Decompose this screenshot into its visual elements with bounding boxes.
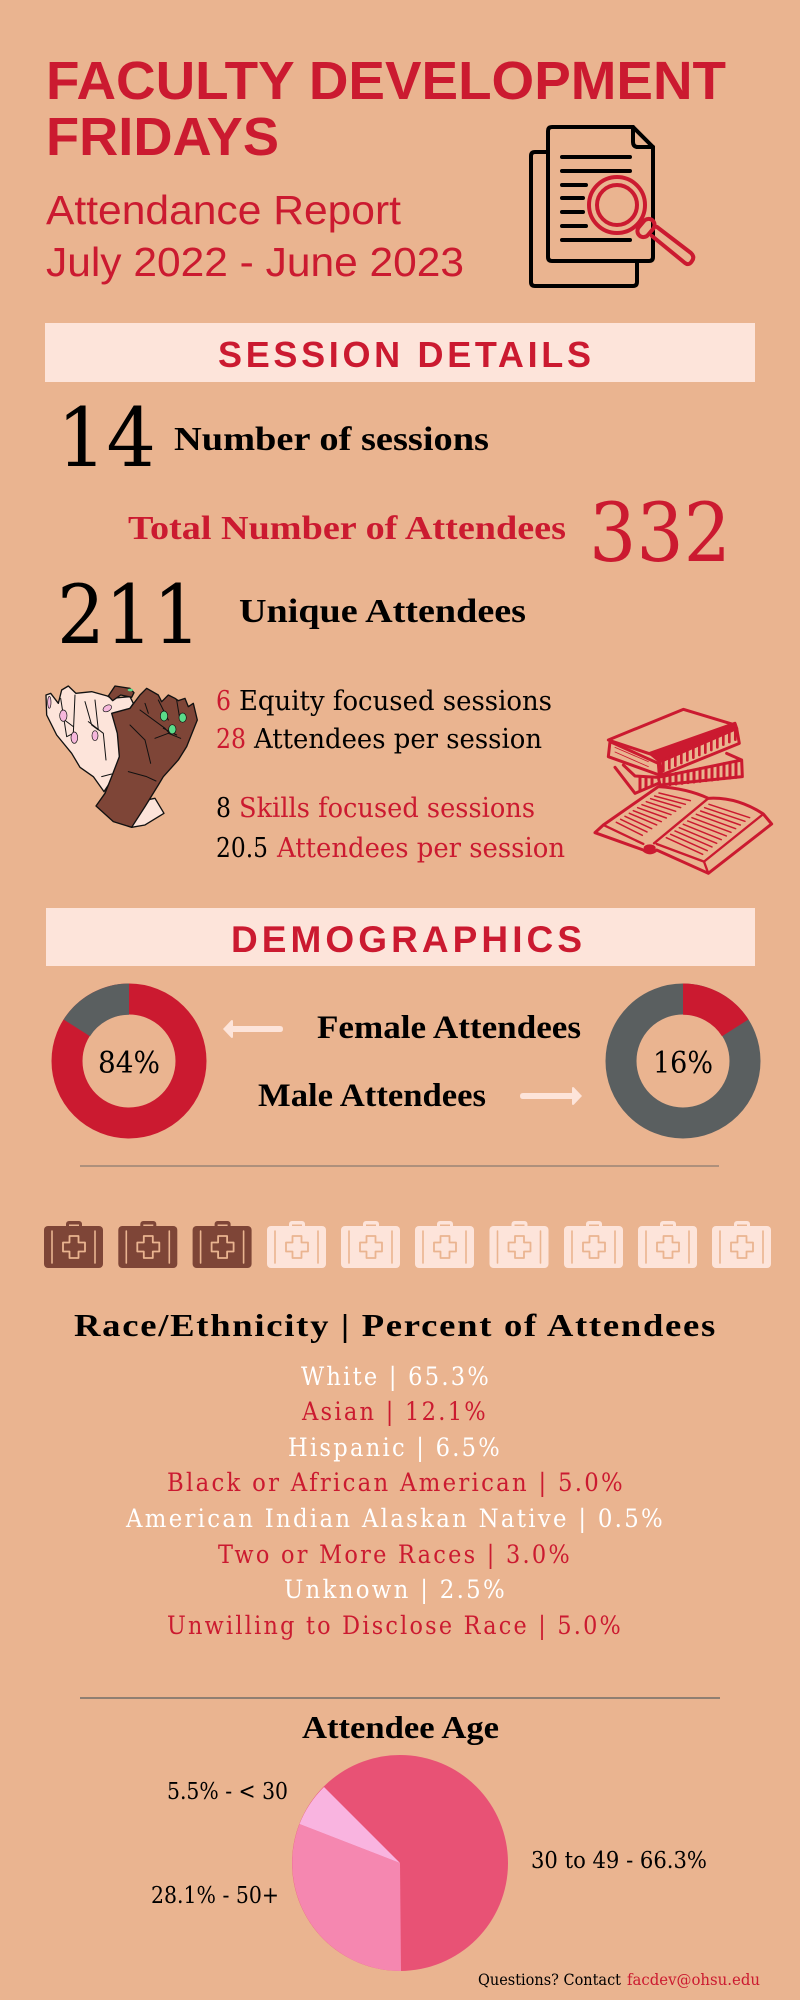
stat: unique attendees: Unique Attendees (239, 593, 526, 630)
icon row: briefcases, 3 of 10 filled (44, 1221, 771, 1268)
stat: total attendees: Total Number of Attendees (128, 510, 566, 547)
stat: number of sessions: 14 (57, 392, 156, 486)
chart: male donut 16% (621, 984, 748, 1123)
chart: female donut 84% (64, 984, 191, 1123)
stat: total attendees: 332 (589, 487, 731, 581)
stat: number of sessions: Number of sessions (174, 421, 489, 458)
chart: attendee age pie (292, 1755, 508, 1971)
subtitle (46, 187, 464, 285)
stat: number of sessions (57, 392, 489, 486)
text: skills focused sessions (216, 793, 565, 864)
label: 50 and over: 28.1% - 50+ (151, 1883, 279, 1909)
text: skills focused sessions: Skills focused sessions (239, 793, 535, 824)
title: FACULTY DEVELOPMENT (46, 51, 726, 111)
label: female attendees: Female Attendees (317, 1010, 581, 1046)
panel: session details heading (45, 323, 755, 382)
heading: attendee age: Attendee Age (302, 1709, 499, 1745)
label: under 30: 5.5% - < 30 (167, 1779, 288, 1805)
panel: session details heading: SESSION DETAILS (218, 334, 591, 375)
arrow: to male donut (520, 1087, 582, 1105)
list: race and ethnicity percentages: Hispanic | 6.5% (288, 1433, 502, 1463)
arrow: to female donut (223, 1020, 283, 1038)
text: equity focused sessions: Equity focused sessions (239, 686, 552, 717)
list: race and ethnicity percentages: White | 65.3% (301, 1362, 491, 1392)
label: 30 to 49: 30 to 49 - 66.3% (531, 1848, 707, 1874)
list: race and ethnicity percentages: Unknown | 2.5% (284, 1575, 507, 1605)
icon: documents with magnifying glass (531, 127, 693, 286)
list: race and ethnicity percentages (125, 1362, 665, 1641)
stat: unique attendees: 211 (57, 569, 201, 663)
text: skills focused sessions: Attendees per session (276, 833, 565, 864)
stat: unique attendees (57, 569, 526, 663)
panel: demographics heading: DEMOGRAPHICS (231, 919, 582, 960)
stat: total attendees (128, 487, 731, 581)
icon: stack of books (595, 709, 772, 873)
text: equity focused sessions: Attendees per session (253, 724, 542, 755)
list: race and ethnicity percentages: Unwilling to Disclose Race | 5.0% (167, 1611, 623, 1641)
footer: contact: Questions? Contact (478, 1970, 622, 1989)
title (46, 51, 726, 167)
chart: female donut 84%: 84% (98, 1046, 160, 1081)
footer: contact (478, 1970, 760, 1989)
panel: demographics heading (46, 908, 755, 966)
chart: male donut 16%: 16% (653, 1046, 713, 1081)
title: FRIDAYS (46, 107, 279, 167)
list: race and ethnicity percentages: Black or African American | 5.0% (167, 1468, 625, 1498)
text: skills focused sessions: 20.5 (216, 833, 268, 864)
list: race and ethnicity percentages: American Indian Alaskan Native | 0.5% (125, 1504, 665, 1534)
heading: race and ethnicity: Race/Ethnicity | Percent of Attendees (74, 1307, 717, 1343)
text: equity focused sessions (216, 686, 552, 755)
footer: contact: facdev@ohsu.edu (627, 1970, 760, 1989)
list: race and ethnicity percentages: Two or More Races | 3.0% (218, 1540, 572, 1570)
label: male attendees: Male Attendees (258, 1078, 486, 1114)
subtitle: Attendance Report (46, 187, 402, 233)
list: race and ethnicity percentages: Asian | 12.1% (301, 1397, 488, 1427)
subtitle: July 2022 - June 2023 (46, 239, 464, 285)
text: skills focused sessions: 8 (216, 793, 231, 824)
icon: linked hands (46, 686, 197, 827)
text: equity focused sessions: 28 (216, 724, 246, 755)
text: equity focused sessions: 6 (216, 686, 231, 717)
